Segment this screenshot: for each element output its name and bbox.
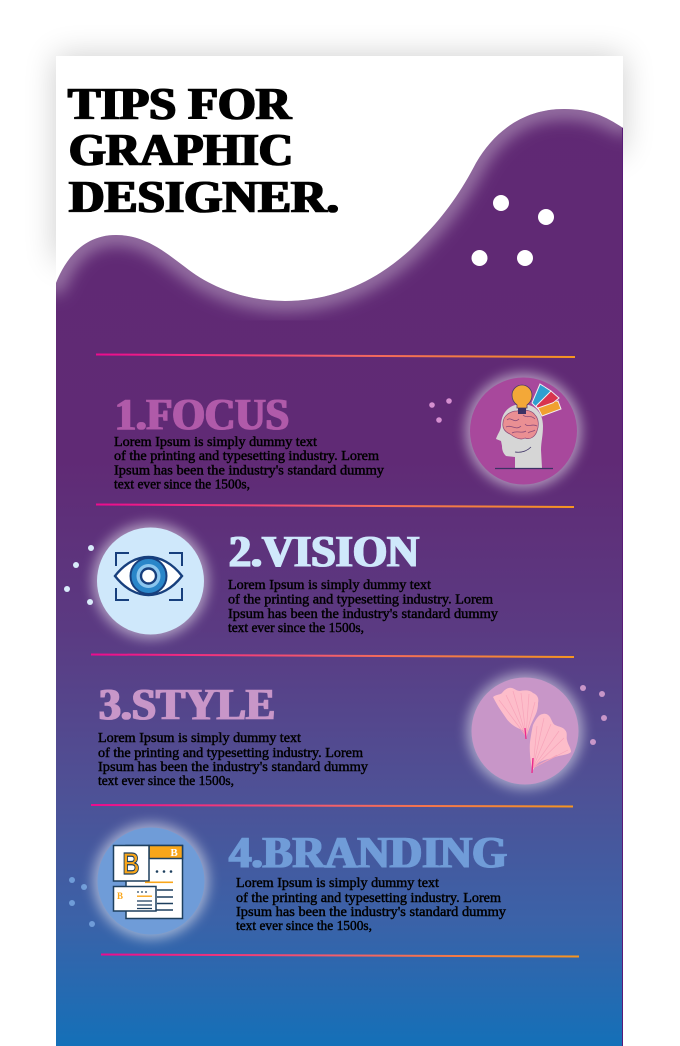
title <box>68 78 339 222</box>
title: TIPS FOR <box>68 78 292 129</box>
dots: style <box>580 685 607 745</box>
text block: focus: text ever since the 1500s, <box>114 476 250 492</box>
text block: focus <box>114 434 384 492</box>
text block: vision: Ipsum has been the industry's standard dummy <box>228 606 498 621</box>
text block: branding: of the printing and typesetting industry. Lorem <box>236 890 502 905</box>
section 2: vision <box>64 523 498 639</box>
icon: brand documents: B <box>170 847 178 859</box>
panel shadow <box>56 56 623 262</box>
section 3: style <box>98 673 607 789</box>
icon: head with brain, bulb and swatches <box>466 373 582 489</box>
text block: vision: text ever since the 1500s, <box>228 620 364 635</box>
icon: ginkgo leaves <box>467 673 583 789</box>
text block: branding: text ever since the 1500s, <box>236 918 372 933</box>
purple wave background <box>50 100 630 1046</box>
text block: style: Ipsum has been the industry's standard dummy <box>98 759 368 774</box>
text block: focus: Ipsum has been the industry's standard dummy <box>114 462 384 478</box>
title: GRAPHIC <box>69 124 293 175</box>
text block: focus: of the printing and typesetting industry. Lorem <box>114 448 380 463</box>
dots: focus <box>429 398 452 423</box>
text block: style: text ever since the 1500s, <box>98 773 234 788</box>
heading: branding: 4.BRANDING <box>229 828 507 877</box>
heading: focus: 1.FOCUS <box>115 390 289 439</box>
icon: brand documents: B <box>122 846 140 881</box>
text block: focus: Lorem Ipsum is simply dummy text <box>114 434 317 449</box>
icon: brand documents: B <box>117 891 123 901</box>
section 4: branding <box>69 823 507 939</box>
decorative white dots <box>472 195 554 266</box>
icon: eye <box>92 523 208 639</box>
heading: vision: 2.VISION <box>229 527 419 576</box>
text block: branding <box>236 875 506 933</box>
text block: style: Lorem Ipsum is simply dummy text <box>98 730 301 745</box>
section 1: focus <box>114 373 582 492</box>
text block: branding: Lorem Ipsum is simply dummy text <box>236 875 439 890</box>
title: DESIGNER. <box>69 171 339 222</box>
text block: vision: of the printing and typesetting industry. Lorem <box>228 592 494 606</box>
text block: style <box>98 730 368 788</box>
text block: style: of the printing and typesetting industry. Lorem <box>98 745 364 760</box>
gradient divider lines <box>91 354 579 958</box>
dots: branding <box>69 877 95 927</box>
text block: branding: Ipsum has been the industry's standard dummy <box>236 904 506 919</box>
heading: style: 3.STYLE <box>99 680 275 729</box>
text block: vision <box>228 577 498 635</box>
white panel <box>56 56 623 1046</box>
text block: vision: Lorem Ipsum is simply dummy text <box>228 577 431 592</box>
icon: brand documents <box>93 823 209 939</box>
dots: vision <box>64 545 94 605</box>
